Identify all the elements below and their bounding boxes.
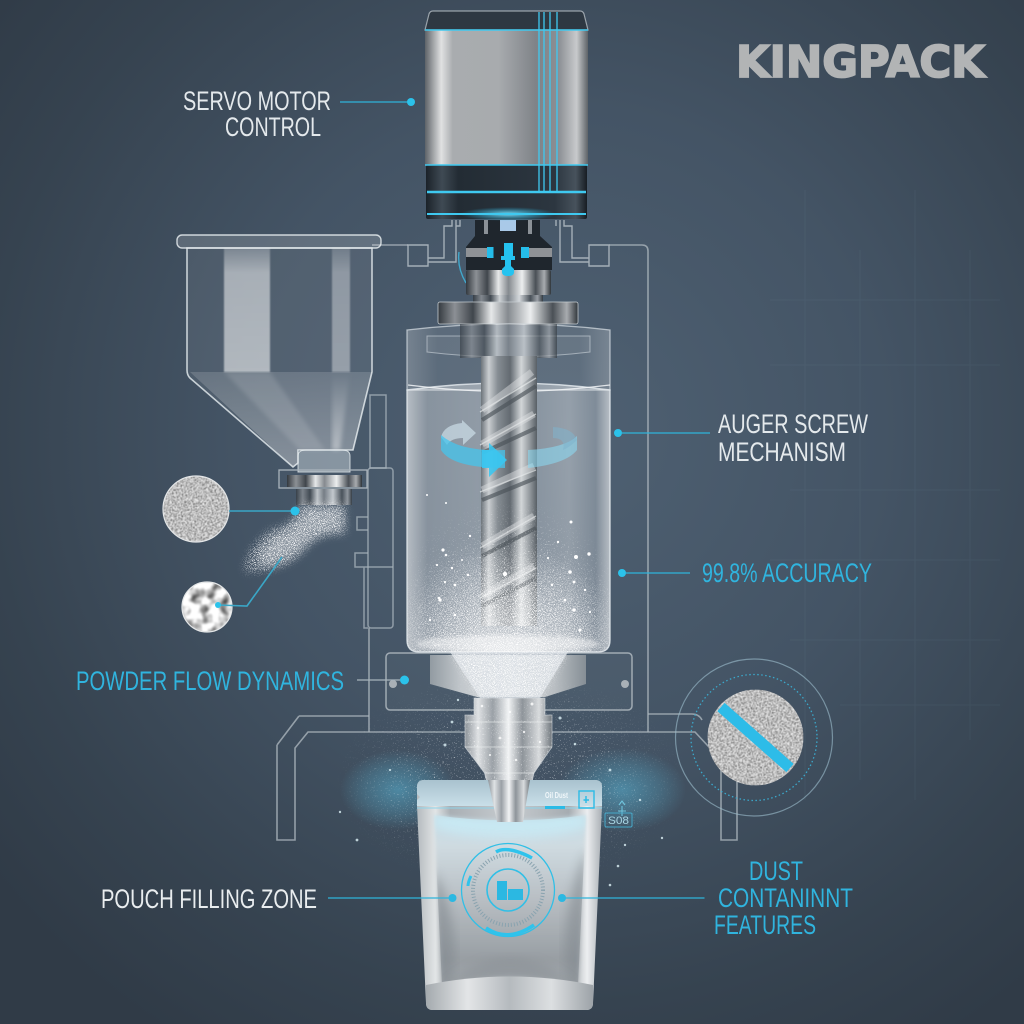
leader: powder flow xyxy=(357,676,409,684)
leader: granules xyxy=(215,557,282,608)
hopper rim xyxy=(177,235,381,248)
screw shaft xyxy=(480,356,537,626)
motor xyxy=(425,11,588,221)
pouch xyxy=(417,780,602,1010)
flange xyxy=(438,302,578,324)
pouch interior xyxy=(434,815,586,985)
leader: dust containment xyxy=(558,894,704,902)
pouch outline body xyxy=(417,780,602,1010)
lower coupling collar xyxy=(466,270,551,295)
cylinder upper glass xyxy=(407,324,610,390)
mounting plate xyxy=(386,653,632,710)
timer readout xyxy=(605,801,632,827)
label: dust containment features: CONTANINNT xyxy=(718,883,853,913)
glow under motor xyxy=(460,207,556,221)
label: auger screw mechanism: MECHANISM xyxy=(718,437,846,467)
magnified powder callout xyxy=(676,659,832,816)
front arrow head xyxy=(482,443,507,477)
label: servo motor control xyxy=(183,86,331,142)
leader: pouch filling xyxy=(328,894,456,902)
powder particles xyxy=(426,494,591,632)
label: dust containment features: DUST xyxy=(749,856,803,886)
sample: granules xyxy=(182,582,232,632)
label: dust containment features: FEATURES xyxy=(714,910,816,940)
pouch top label: Oil Dust xyxy=(545,791,568,800)
powder sample callouts xyxy=(163,476,300,632)
motor body xyxy=(425,30,588,165)
pouch bottom seam xyxy=(426,976,593,1010)
pouch emblem xyxy=(462,844,554,936)
icon: pouch device xyxy=(579,791,594,808)
icon: coupling down arrow xyxy=(501,243,515,276)
pouch nozzle overlap xyxy=(488,780,530,822)
side mounting bracket xyxy=(355,395,393,628)
blue band xyxy=(721,707,790,768)
cylinder filled glass xyxy=(407,383,610,652)
outlet clamp xyxy=(279,470,367,505)
sweeping band xyxy=(441,435,505,468)
outlet glass cap xyxy=(298,450,350,472)
coupling band xyxy=(466,247,552,258)
timer readout: S08 xyxy=(608,815,629,827)
label: servo motor control: CONTROL xyxy=(225,112,321,142)
motor brackets xyxy=(408,220,609,283)
icon: rotation arrow xyxy=(441,420,577,477)
outlet funnel and nozzle xyxy=(430,652,586,822)
dust cloud xyxy=(335,670,686,890)
leader: auger screw xyxy=(614,429,710,437)
label: dust containment features xyxy=(714,856,853,940)
pouch top seal xyxy=(417,780,602,806)
powder accumulation xyxy=(407,502,610,652)
leader: fine powder xyxy=(229,506,300,516)
hopper xyxy=(177,235,381,505)
rear arrow xyxy=(441,420,476,445)
pouch fold shading xyxy=(437,816,584,982)
powder stream from hopper xyxy=(245,505,345,572)
cyan trims xyxy=(425,12,588,214)
label: powder flow dynamics: POWDER FLOW DYNAMICS xyxy=(76,666,344,696)
funnel xyxy=(430,655,586,697)
motor lower band xyxy=(426,165,587,219)
hopper cone shading xyxy=(190,372,372,467)
upper coupling xyxy=(466,220,552,270)
inner collar xyxy=(427,324,590,358)
coupling assembly xyxy=(438,220,578,324)
motor top cap xyxy=(425,11,588,30)
machine frame lines xyxy=(277,245,737,840)
sample: fine powder xyxy=(163,476,229,542)
leader: servo motor xyxy=(340,98,415,106)
hopper body xyxy=(187,248,372,467)
leader: accuracy xyxy=(618,569,690,577)
label: accuracy: 99.8% ACCURACY xyxy=(702,558,872,588)
label: servo motor control: SERVO MOTOR xyxy=(183,86,331,116)
label: auger screw mechanism xyxy=(718,409,868,467)
hopper reflections xyxy=(224,248,350,450)
label: auger screw mechanism: AUGER SCREW xyxy=(718,409,868,439)
nozzle xyxy=(465,698,552,822)
logo: KINGPACK: KINGPACK xyxy=(736,37,987,88)
pouch top label xyxy=(545,791,568,809)
auger cylinder xyxy=(406,323,611,653)
funnel powder xyxy=(450,652,568,698)
label: pouch filling zone: POUCH FILLING ZONE xyxy=(101,884,317,914)
